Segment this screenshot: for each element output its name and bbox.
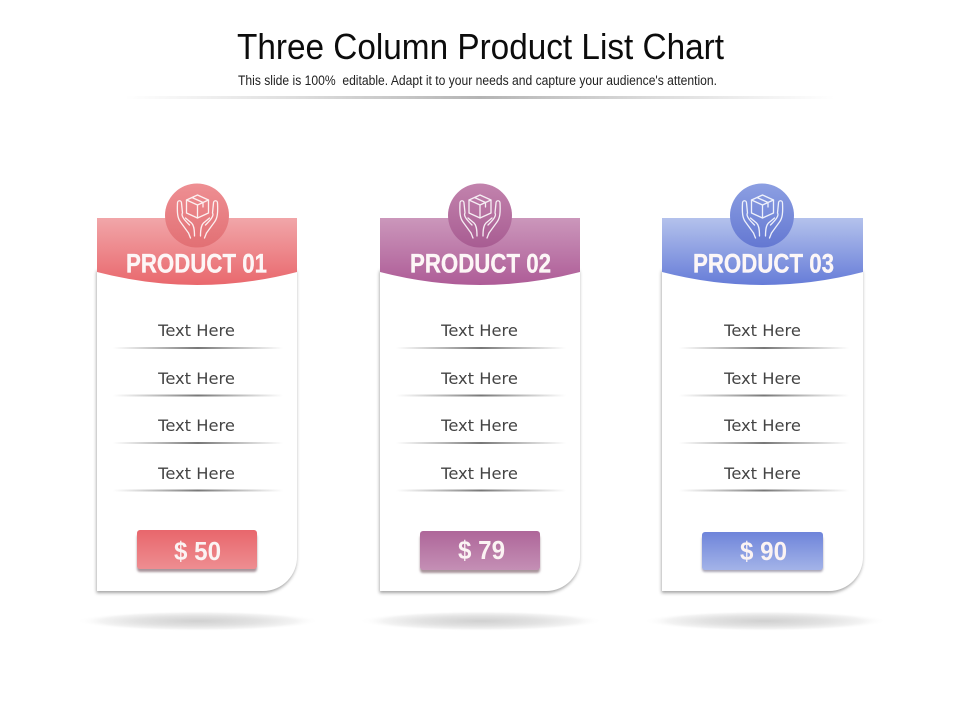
list items: Text Here: [723, 464, 801, 483]
list items: [396, 321, 566, 492]
list items: Text Here: [440, 369, 518, 388]
list items: Text Here: [440, 321, 518, 340]
panel: product 01: [76, 184, 320, 631]
heading: PRODUCT 02: [410, 248, 551, 278]
list items: Text Here: [157, 416, 235, 435]
list items: Text Here: [157, 369, 235, 388]
icon circle with hands and box: [730, 184, 794, 248]
card body: [662, 240, 863, 593]
card body: [380, 240, 580, 593]
price button: $ 90: [740, 536, 787, 566]
card body: [96, 240, 297, 593]
floor shadow: [643, 611, 887, 631]
floor shadow: [359, 611, 603, 631]
list items: Text Here: [440, 464, 518, 483]
list items: [679, 321, 849, 492]
price button: $ 50: [174, 536, 221, 566]
heading: PRODUCT 01: [126, 248, 267, 278]
price button: [137, 530, 257, 572]
panel: product 03: [643, 184, 887, 631]
panel: product 02: [359, 184, 603, 631]
icon circle with hands and box: [165, 184, 229, 248]
title: Three Column Product List Chart: [237, 26, 724, 67]
price button: [420, 531, 540, 573]
list items: Text Here: [157, 464, 235, 483]
list items: [113, 321, 283, 492]
list items: Text Here: [723, 321, 801, 340]
subtitle: This slide is 100% editable. Adapt it to your needs and capture your audience's attention.: [238, 73, 717, 88]
list items: Text Here: [723, 416, 801, 435]
header band: [662, 218, 863, 285]
list items: Text Here: [157, 321, 235, 340]
floor shadow: [76, 611, 320, 631]
price button: [702, 532, 823, 572]
list items: Text Here: [440, 416, 518, 435]
list items: Text Here: [723, 369, 801, 388]
price button: $ 79: [458, 535, 505, 565]
icon circle with hands and box: [448, 184, 512, 248]
header band: [97, 218, 297, 285]
title divider shadow: [125, 96, 835, 99]
header band: [380, 218, 580, 285]
heading: PRODUCT 03: [693, 248, 834, 278]
